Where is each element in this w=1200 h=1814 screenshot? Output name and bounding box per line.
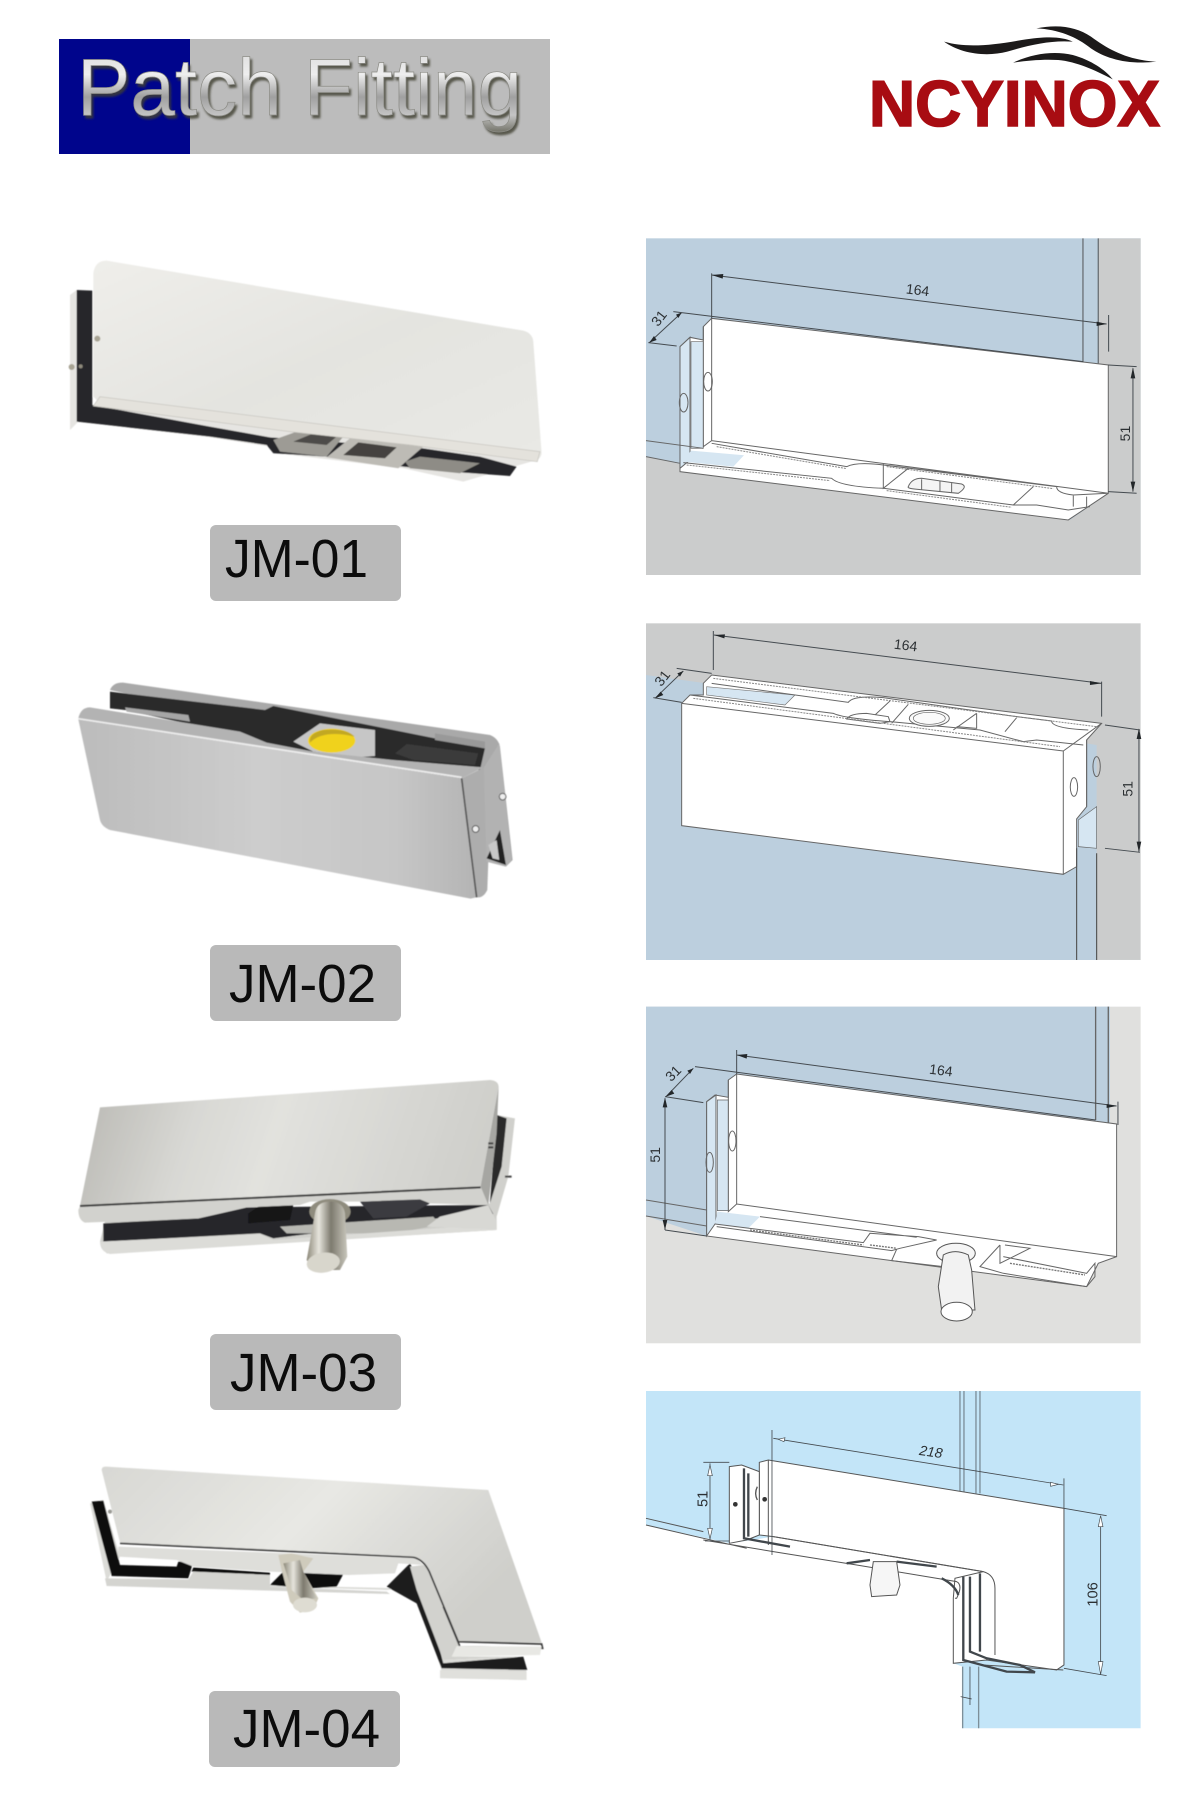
dark channel <box>744 1468 1035 1672</box>
product photo: JM-01 <box>69 261 542 482</box>
logo wordmark: NCYINOX <box>869 67 1160 140</box>
glass edge lines <box>1083 238 1098 363</box>
fitting detail lines <box>646 1460 1063 1670</box>
label: JM-03: JM-03 <box>230 1343 377 1403</box>
dimension: 31: 31 <box>662 1062 684 1084</box>
L-shaped face <box>102 1467 542 1643</box>
product photo: JM-02 <box>78 683 513 899</box>
dimension drawing: JM-01 <box>646 238 1141 575</box>
dimension: 164: 164 <box>893 636 918 654</box>
black channel <box>77 290 517 476</box>
mounting holes <box>729 1131 736 1151</box>
chrome lips <box>118 1547 423 1575</box>
back plate <box>110 683 513 867</box>
back plate <box>90 1500 527 1680</box>
drawing background <box>646 1007 1141 1343</box>
glass edge lines <box>960 1391 980 1728</box>
light blue strips <box>680 337 690 468</box>
dimension: 51: 51 <box>647 1147 663 1163</box>
yellow insert <box>308 729 355 753</box>
logo swoosh icon <box>944 26 1156 79</box>
top face <box>80 1080 499 1206</box>
label: JM-03 <box>210 1334 401 1410</box>
pin <box>937 1243 975 1321</box>
dimension drawing: JM-03 <box>646 1007 1141 1343</box>
back plate <box>100 1115 515 1253</box>
dimension: 218: 218 <box>917 1442 944 1461</box>
lower edge chrome <box>105 1572 390 1594</box>
drawing background <box>646 238 1141 575</box>
fitting detail lines <box>682 683 1102 874</box>
left end flap <box>729 1465 759 1543</box>
dimension: 164: 164 <box>928 1061 954 1080</box>
slider mechanism <box>273 432 343 457</box>
dimension lines <box>648 273 1137 493</box>
light blue strips <box>707 687 795 705</box>
lower back edge <box>100 1224 497 1254</box>
front face <box>78 719 477 899</box>
drawing background <box>646 1391 1141 1728</box>
screw <box>488 1143 512 1177</box>
banner gray block <box>190 39 550 154</box>
pin <box>307 1202 347 1270</box>
title: Patch Fitting <box>77 43 522 133</box>
front plate <box>93 261 542 462</box>
dimension: 51: 51 <box>1117 426 1133 441</box>
collar around pin <box>309 1199 351 1224</box>
fitting body <box>707 1074 1117 1287</box>
pin <box>278 1553 318 1613</box>
grey block <box>293 723 375 757</box>
dark interior <box>110 692 485 770</box>
light blue strips <box>707 1095 716 1236</box>
fitting body <box>759 1460 1064 1670</box>
glass edge lines <box>1077 848 1097 960</box>
fitting body <box>680 318 1108 520</box>
screws <box>94 336 100 342</box>
banner blue block <box>59 39 190 154</box>
label: JM-02: JM-02 <box>229 954 376 1014</box>
product photo: JM-04 <box>90 1467 543 1680</box>
dimension: 51: 51 <box>695 1491 711 1507</box>
label: JM-01 <box>210 525 401 601</box>
dimension lines <box>653 631 1140 852</box>
plate lower lip <box>93 397 540 462</box>
header banner: Patch Fitting <box>59 39 550 154</box>
front lip <box>78 1187 488 1223</box>
drawing background <box>646 623 1141 960</box>
dimension lines <box>703 1430 1107 1705</box>
side edge <box>462 767 488 897</box>
dimension: 31: 31 <box>651 667 673 689</box>
mounting holes <box>1070 778 1078 796</box>
pin <box>870 1562 900 1597</box>
label: JM-04 <box>209 1691 400 1767</box>
clamp end <box>487 830 506 865</box>
fitting body <box>682 675 1102 874</box>
label: JM-01: JM-01 <box>225 529 368 589</box>
screws <box>733 1502 738 1507</box>
logo: ncyinox <box>869 26 1160 140</box>
dark channel <box>103 1205 493 1242</box>
fitting detail lines <box>646 1074 1117 1287</box>
fitting detail lines <box>646 318 1108 510</box>
dimension drawing: JM-04 <box>646 1391 1141 1728</box>
label: JM-02 <box>210 945 401 1021</box>
label: JM-04: JM-04 <box>233 1699 380 1759</box>
screws <box>472 826 479 832</box>
mounting holes <box>704 372 712 391</box>
dimension: 106: 106 <box>1085 1582 1101 1607</box>
dimension: 51: 51 <box>1120 781 1136 797</box>
dimension lines <box>665 1050 1118 1236</box>
glass edge lines <box>1096 1007 1108 1123</box>
upper lip <box>78 707 483 778</box>
product photo: JM-03 <box>78 1080 515 1275</box>
dimension: 31: 31 <box>648 307 670 329</box>
dimension drawing: JM-02 <box>646 623 1141 960</box>
dimension: 164: 164 <box>905 280 930 299</box>
